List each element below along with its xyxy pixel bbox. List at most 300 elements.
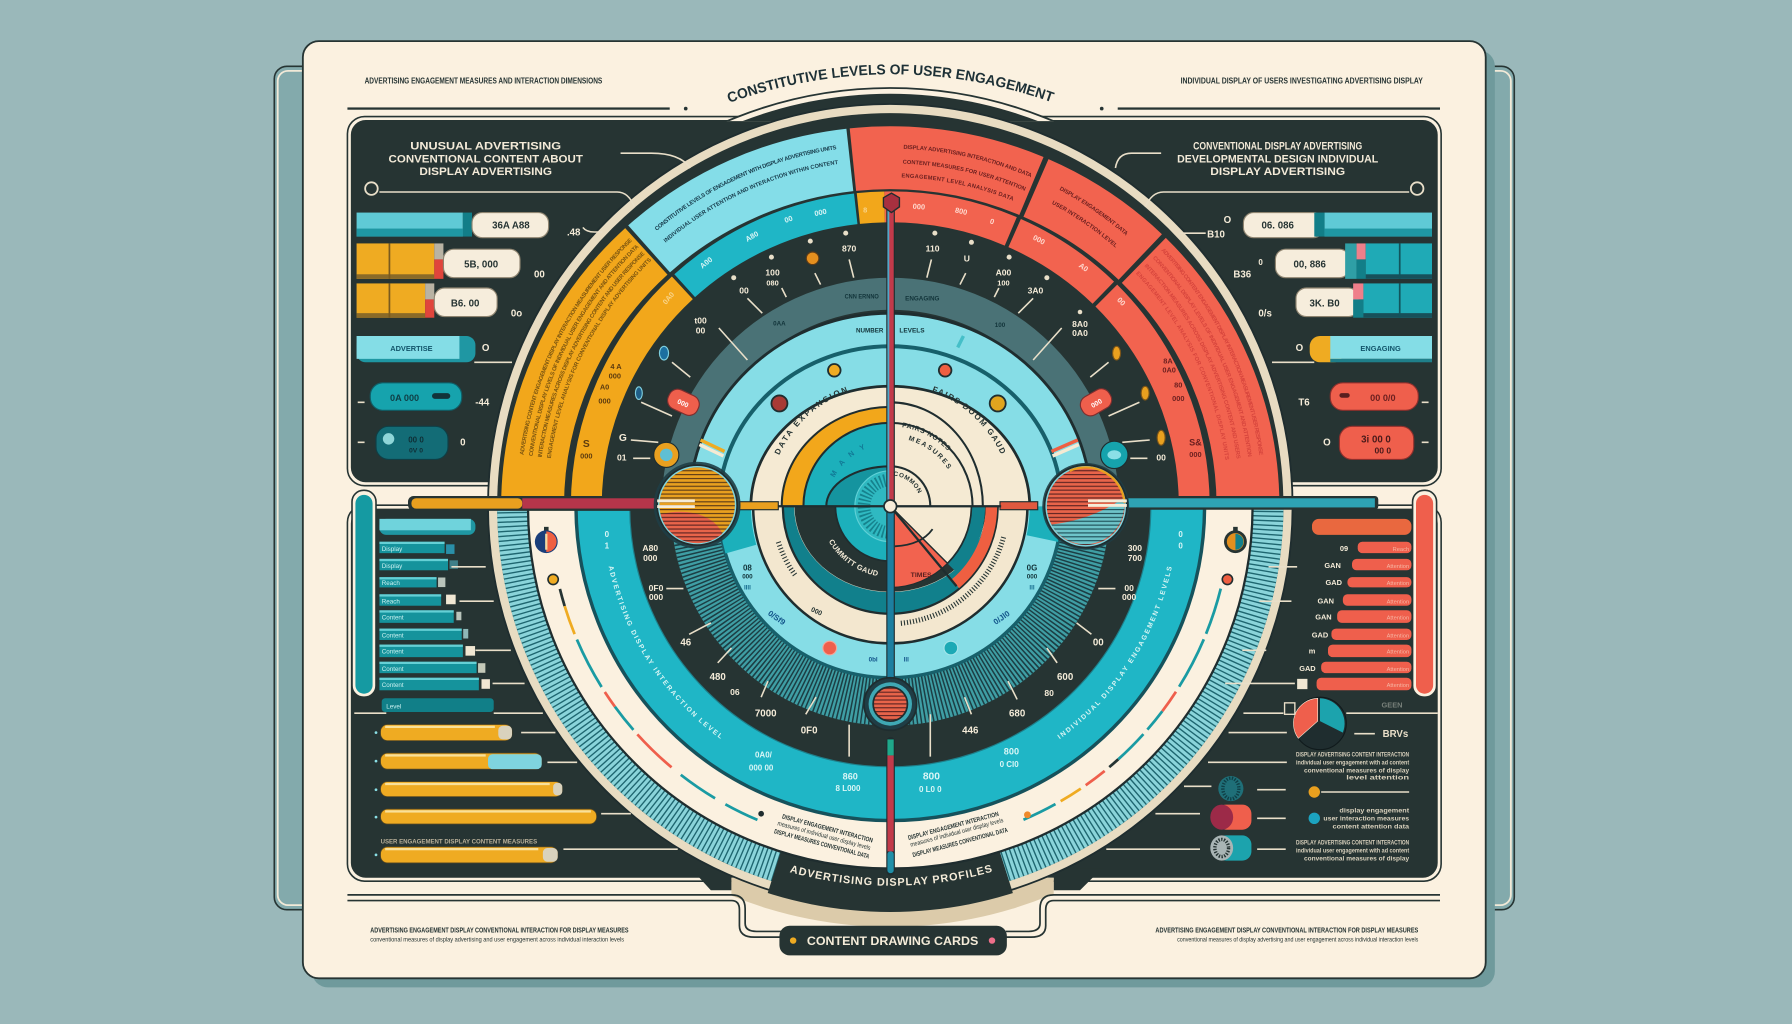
band text: red middle: USER INTERACTION LEVEL: [1052, 200, 1116, 248]
right outer labels: O: [1224, 215, 1232, 226]
lower scale labels left: 0F0: [801, 726, 818, 737]
left outer labels: 00: [534, 270, 545, 281]
title: CONSTITUTIVE LEVELS OF USER ENGAGEMENT: [728, 64, 1055, 102]
pie labels: GEEN: [1382, 700, 1402, 709]
lower scale labels left: 000: [643, 553, 658, 563]
footer note left: conventional measures of display advertising and user engagement across individual interaction levels: [370, 937, 624, 944]
hatched inner ring: [674, 538, 1106, 725]
inner band segments: [571, 191, 1210, 496]
right bar 2: [1275, 243, 1432, 279]
lower scale labels right: [930, 543, 1142, 757]
footer note right: conventional measures of display advertising and user engagement across individual interaction levels: [1177, 937, 1418, 944]
lower ring curved texts: CUMMITT GAUD: [830, 540, 878, 576]
inner curved labels: COMMON: [894, 472, 922, 494]
needle upper: [883, 193, 899, 506]
right heading: CONVENTIONAL DISPLAY ADVERTISING: [1193, 141, 1362, 153]
inner curved labels: MEASURES: [908, 436, 952, 468]
right capsule: [1413, 490, 1437, 697]
right bar 4: ENGAGING: [1360, 344, 1401, 353]
hatched outer ring: [497, 510, 1284, 881]
grey ring labels: LEVELS: [899, 328, 925, 335]
horizontal rod right: [1086, 496, 1378, 510]
grey ring labels: [773, 293, 1006, 335]
lower ring curved texts: IIIIIIIIIIIIIIIIIIIIIIIIIIIIIIIIIIIIIIIIIIIIIIII: [900, 536, 1006, 626]
tan shadow below dial: [731, 878, 1054, 926]
teal band: [574, 510, 1206, 822]
pin: red pill left: 000: [676, 398, 689, 410]
bar list: teal left: Content: [382, 633, 404, 640]
inner lower labels: 000: [742, 573, 753, 580]
dial scale labels upper left: 100: [765, 267, 780, 277]
double rule bottom left: [347, 895, 782, 937]
inner lower labels: 0/Sf9: [766, 609, 787, 627]
inner band labels: 000: [1172, 394, 1184, 403]
left bar 2: [357, 243, 520, 279]
cream ring notes right: DISPLAY MEASURES CONVENTIONAL DATA: [912, 827, 1009, 859]
text block 3: conventional measures of display: [1304, 856, 1410, 863]
dial scale labels upper left: 00: [739, 286, 749, 296]
light blue ring: [720, 510, 1060, 679]
pin: red pill right: [1077, 385, 1115, 419]
inner band labels: S&: [1189, 438, 1202, 448]
bar list: red right: Attention: [1387, 599, 1409, 605]
cream inner ring: [752, 507, 1029, 645]
light blue inner: [721, 344, 1060, 506]
inner lower labels: 000: [810, 606, 823, 618]
text block 1: [1296, 752, 1410, 781]
band text: red middle: DISPLAY ENGAGEMENT DATA: [1060, 186, 1128, 236]
lower scale labels right: 80: [1044, 688, 1054, 698]
bar list: teal left: Display: [382, 563, 403, 570]
lower scale labels left: 0F0: [649, 583, 664, 593]
inner band labels: 8: [863, 206, 867, 215]
pins and small rings: 01: [617, 453, 627, 463]
bar list: teal left: Content: [382, 666, 404, 673]
pin: red pill left: [665, 386, 702, 418]
grey ring labels: CNN ERNNO: [845, 293, 879, 300]
left outer labels: O: [482, 343, 490, 354]
grey ring labels: NUMBER: [856, 328, 884, 335]
inner band labels: 0A0: [1162, 366, 1176, 375]
inner band labels: 0: [989, 217, 995, 226]
inner band labels: 000: [598, 396, 611, 405]
inner band labels: 000: [1189, 450, 1202, 459]
dial scale labels upper right: A00: [996, 267, 1012, 277]
grey teal ring: [664, 278, 1117, 478]
bar list: red right: Attention: [1387, 615, 1409, 621]
band text: red right: INTERACTION MEASURES ACROSS DISPLAY ADVERTISING CONTENT AND USERS: [1144, 264, 1240, 458]
inner lower labels: [742, 563, 1038, 664]
band text: orange: ADVERTISING CONTENT ENGAGEMENT DISPLAY INTERACTION MEASUREMENT USER RESPONSE: [520, 238, 632, 455]
pie chart: [1293, 697, 1346, 750]
pin: red pill right: 000: [1090, 398, 1104, 410]
bar list: red right: Attention: [1387, 650, 1409, 656]
left heading: [389, 141, 583, 178]
right pill 6: 00 0: [1375, 446, 1391, 456]
lower scale labels right: 446: [962, 726, 979, 737]
dial scale labels upper right: U: [964, 254, 970, 264]
lower scale labels left: 7000: [755, 709, 777, 720]
header rule left: [347, 107, 688, 110]
grey ring labels: 100: [995, 322, 1006, 329]
card: [303, 41, 1486, 978]
bar list: red right: Attention: [1387, 564, 1409, 570]
horizontal rod left: [408, 496, 697, 511]
footer note left: ADVERTISING ENGAGEMENT DISPLAY CONVENTIONAL INTERACTION FOR DISPLAY MEASURES: [370, 926, 629, 935]
inner lower labels: 08: [743, 563, 752, 572]
band text: blue: CONSTITUTIVE LEVELS OF ENGAGEMENT WITH DISPLAY ADVERTISING UNITS: [655, 146, 836, 230]
text block 1: level attention: [1346, 774, 1409, 781]
dial scale labels upper right: 0A0: [1072, 328, 1088, 338]
right bar 4: [1310, 336, 1432, 362]
teal inner ring: [782, 507, 999, 615]
text block 1: DISPLAY ADVERTISING CONTENT INTERACTION: [1296, 752, 1410, 759]
band text: blue: INDIVIDUAL USER ATTENTION AND INTERACTION WITHIN CONTENT: [664, 160, 838, 242]
needle lower: [886, 506, 895, 875]
left pill 5: 0A 000: [390, 393, 419, 403]
inner band labels: S: [583, 439, 590, 450]
bar list: teal left: Display: [382, 546, 403, 553]
pins and small rings: G: [619, 433, 627, 444]
right outer labels: B10: [1207, 230, 1225, 241]
inner lower labels: 0G: [1027, 563, 1037, 572]
left outer labels: -44: [475, 398, 490, 409]
light blue outer: [693, 314, 1088, 506]
inner curved labels: DATA EXPANSION: [774, 386, 847, 455]
text block 2: content attention data: [1333, 824, 1410, 831]
inner band labels: 80: [1174, 380, 1182, 389]
lower scale labels right: 300: [1128, 543, 1142, 553]
double rule bottom right: [1006, 895, 1440, 937]
right bar 2: 00, 886: [1294, 259, 1327, 270]
inner curved labels: FAIRS DOOM GAUD: [932, 386, 1005, 454]
dial scale labels upper right: [926, 231, 1088, 338]
bar list: red right: [1225, 519, 1411, 690]
lower scale labels left: A80: [642, 543, 658, 553]
right pill 5: [1330, 383, 1418, 410]
teal band inner labels: 1: [605, 542, 610, 551]
left pill 5: [370, 383, 462, 410]
connectors left: [365, 153, 690, 362]
bar list: teal left: Reach: [382, 598, 400, 605]
teal band inner labels: 0: [1178, 530, 1183, 539]
inner curved labels: [774, 386, 1005, 494]
band text: red top: [902, 144, 1031, 201]
upper right arcs: [894, 401, 984, 506]
left heading: UNUSUAL ADVERTISING: [410, 141, 561, 153]
bar list: red right: Attention: [1387, 683, 1409, 689]
inner teal left quarter: [836, 507, 886, 560]
left outer labels: 0: [460, 438, 466, 449]
inner curved labels: MANY: [830, 444, 864, 478]
inner band labels: 0A0: [661, 290, 676, 306]
bar list: red right: GAD: [1325, 578, 1343, 587]
left pill 6: [376, 426, 448, 459]
text block 3: individual user engagement with ad content: [1296, 848, 1410, 855]
cream ring notes left: DISPLAY MEASURES CONVENTIONAL DATA: [773, 828, 870, 861]
band text: red right: ENGAGEMENT LEVEL ANALYSIS FOR CONVENTIONAL DISPLAY UNITS: [1136, 271, 1229, 460]
lower scale labels left: 480: [710, 672, 726, 683]
back tab left: [274, 66, 331, 910]
lower scale labels right: 000: [1122, 592, 1137, 602]
bar list: red right: m: [1309, 647, 1316, 656]
inner lower labels: lll: [904, 657, 909, 664]
bar list: red right: 09: [1340, 544, 1348, 553]
band text: orange: CONVENTIONAL DISPLAY LEVELS OF INDIVIDUAL USER ENGAGEMENT AND ATTENTION DATA: [529, 245, 639, 456]
cream ring notes left: [773, 813, 874, 861]
inner lower labels: IIII: [744, 585, 751, 592]
grey ring labels: ENGAGING: [905, 296, 940, 303]
inner band labels: A0: [600, 383, 609, 392]
text block 2: display engagement: [1339, 808, 1410, 815]
band text: red top: ENGAGEMENT LEVEL ANALYSIS DATA: [902, 174, 1013, 201]
teal band inner labels: 800: [1004, 746, 1019, 756]
right outer labels: O: [1323, 438, 1331, 449]
inner lower labels: III: [1029, 585, 1035, 592]
bar list: red right: GAD: [1299, 664, 1316, 673]
header note left: ADVERTISING ENGAGEMENT MEASURES AND INTERACTION DIMENSIONS: [365, 75, 603, 85]
teal band inner labels: 0A0/: [755, 751, 773, 760]
inner band labels: 000: [814, 207, 828, 218]
bar list: teal left: Content: [382, 682, 404, 689]
bar list: teal left: Level: [386, 704, 401, 711]
footer note right: ADVERTISING ENGAGEMENT DISPLAY CONVENTIONAL INTERACTION FOR DISPLAY MEASURES: [1155, 926, 1418, 935]
stopwatch icon right: [1224, 527, 1247, 553]
bottom pill: CONTENT DRAWING CARDS: [807, 934, 978, 948]
bar list: teal left: Reach: [382, 580, 400, 587]
bar list: red right: GAN: [1317, 596, 1334, 605]
left heading: CONVENTIONAL CONTENT ABOUT: [389, 153, 583, 165]
lower scale labels right: 00: [1093, 638, 1104, 649]
pins and small rings: [617, 346, 1166, 469]
dial scale labels upper left: 870: [842, 243, 857, 253]
bar list: orange left: [375, 725, 678, 863]
text block 2: [1309, 786, 1410, 831]
grey ring labels: 0AA: [773, 321, 786, 328]
teal band inner labels: 860: [843, 771, 858, 781]
bar list: teal left: Content: [382, 649, 404, 656]
dashed colour arc right: [1023, 588, 1222, 821]
dial scale labels upper right: 8A0: [1072, 319, 1088, 329]
pie labels: BRVs: [1383, 729, 1408, 740]
band text: orange: INTERACTION MEASURES ACROSS DISPLAY ADVERTISING CONTENT AND USER RESPONSE: [538, 252, 645, 457]
lower scale labels left: 06: [730, 687, 740, 697]
text block 3: DISPLAY ADVERTISING CONTENT INTERACTION: [1296, 840, 1410, 847]
cream ring notes right: [907, 811, 1009, 859]
bar list: red right: Attention: [1387, 667, 1409, 673]
hatched roller icons: [1106, 776, 1286, 861]
right pill 5: 00 0/0: [1370, 393, 1396, 403]
lower right sectors: [894, 507, 998, 588]
right bar 3: 3K. B0: [1309, 298, 1340, 309]
bottom medallion: [864, 678, 917, 730]
inner band labels: [580, 202, 1202, 460]
bar list: red right: GAN: [1315, 612, 1332, 621]
bar list: red right: GAN: [1324, 561, 1341, 570]
cream ring: [526, 510, 1254, 868]
dial scale labels upper right: 110: [926, 243, 940, 253]
inner band labels: A0: [1077, 261, 1090, 274]
right bar 1: 06. 086: [1262, 221, 1295, 232]
ring accent slashes: [699, 336, 1079, 456]
dial scale labels upper left: [694, 231, 857, 336]
teal band inner labels: 8 L000: [836, 784, 861, 793]
right outer labels: [1207, 215, 1429, 449]
right outer labels: 0: [1258, 258, 1263, 267]
dial scale labels upper left: 00: [696, 326, 706, 336]
lower ring curved texts: ADVERTISING DISPLAY INTERACTION LEVEL: [608, 566, 721, 739]
teal band inner labels: 800: [923, 771, 940, 782]
right heading: DISPLAY ADVERTISING: [1210, 166, 1345, 178]
medallion left: [654, 462, 741, 549]
dial: lower half: [489, 506, 1292, 912]
lower scale labels left: [642, 543, 849, 757]
inner band labels: 8A: [1163, 356, 1173, 365]
teal band inner labels: 000 00: [749, 763, 774, 772]
teal band inner labels: 0: [1178, 542, 1183, 551]
inner lower labels: 0/Jl0: [992, 609, 1012, 627]
bottom band title: ADVERTISING DISPLAY PROFILES: [790, 865, 992, 886]
left outer labels: [358, 227, 581, 449]
cream ring notes right: measures of individual user display levels: [910, 817, 1004, 849]
inner lower labels: TIMES: [911, 572, 932, 579]
cream ring dots: [548, 574, 1233, 818]
bar list: red right: Attention: [1387, 634, 1409, 640]
outer band segments: [501, 126, 1280, 496]
left bar 2: 5B, 000: [464, 259, 498, 270]
stopwatch icon left: [535, 527, 558, 553]
right bar 1: [1243, 213, 1432, 238]
teal band inner labels: 0 L0 0: [919, 785, 942, 794]
lower scale labels right: 700: [1128, 553, 1142, 563]
lower ring curved texts: IIIIIIIIIIII: [776, 541, 797, 576]
left outer labels: .48: [567, 227, 581, 238]
separators in grey ring: [631, 259, 1150, 458]
left bar 4: [357, 336, 475, 362]
inner curved labels: FAIRS NOTES: [902, 422, 950, 450]
panel outlines: [347, 117, 1441, 881]
short rods: [739, 502, 1038, 510]
center small disc lower: [854, 507, 886, 542]
connectors right: [1115, 153, 1423, 362]
cream ring notes left: measures of individual user display levels: [777, 820, 871, 852]
teal band inner labels: 0: [605, 530, 610, 539]
center small disc: [854, 470, 886, 506]
upper left orange and teal: [780, 406, 886, 506]
lower ring markers: [823, 641, 958, 655]
lower scale labels right: 600: [1057, 672, 1073, 683]
inner band labels: A00: [698, 255, 714, 270]
cream ring upper: [750, 384, 1031, 506]
dashed colour arc left: [558, 588, 758, 822]
bar list: teal left: [354, 519, 543, 713]
cream ring notes right: DISPLAY ENGAGEMENT INTERACTION: [907, 811, 1000, 842]
right outer labels: 0/s: [1258, 309, 1272, 320]
text block 2: user interaction measures: [1323, 816, 1410, 823]
bar list: orange left: USER ENGAGEMENT DISPLAY CONTENT MEASURES: [381, 838, 537, 845]
dial scale labels upper right: 3A0: [1028, 286, 1044, 296]
bar list: teal left: Content: [382, 614, 404, 621]
inner band labels: 000: [1031, 233, 1047, 247]
panel: upper dark: [351, 120, 1438, 482]
light blue ring markers: [771, 364, 1006, 411]
panel: lower dark: [351, 509, 1438, 878]
right outer labels: B36: [1233, 270, 1252, 281]
left pill 6: 0V 0: [409, 448, 423, 455]
left bar 3: [357, 283, 497, 318]
left bar 4: ADVERTISE: [390, 344, 433, 353]
inner band labels: 4 A: [610, 362, 622, 371]
footer note left: [370, 926, 629, 944]
teal band inner labels: 0 Cl0: [1000, 760, 1019, 769]
band text: orange: ENGAGEMENT LEVEL ANALYSIS FOR CONVENTIONAL DISPLAY ADVERTISING UNITS: [546, 258, 651, 458]
dial scale labels upper left: t00: [694, 315, 707, 325]
pie labels: [1208, 700, 1438, 762]
bar list: red right: GAD: [1312, 631, 1329, 640]
inner band labels: 000: [912, 202, 925, 212]
card shadow: [312, 50, 1495, 987]
lower scale labels right: 680: [1009, 709, 1025, 720]
left capsule: [352, 490, 376, 697]
right heading: DEVELOPMENTAL DESIGN INDIVIDUAL: [1177, 153, 1379, 165]
left outer labels: 0o: [511, 309, 522, 320]
text block 1: individual user engagement with ad content: [1296, 760, 1410, 767]
band text: red top: DISPLAY ADVERTISING INTERACTION AND DATA: [904, 144, 1031, 178]
inner band labels: 000: [580, 451, 592, 460]
header rule right: [1100, 107, 1440, 110]
inner band labels: 800: [954, 206, 968, 217]
bottom band: [768, 852, 1013, 912]
dial: upper half: [487, 104, 1294, 506]
lower scale labels left: 46: [680, 638, 692, 649]
right outer labels: O: [1296, 343, 1304, 354]
medallion right: [1042, 463, 1129, 550]
footer note right: [1155, 926, 1418, 944]
right pill 6: 3i 00 0: [1361, 434, 1391, 445]
back tab right: [1457, 66, 1514, 910]
inner band labels: 00: [783, 214, 794, 225]
left bar 1: 36A A88: [492, 221, 530, 232]
pins and small rings: 00: [1156, 453, 1166, 463]
left bar 3: B6. 00: [451, 298, 479, 309]
center hub: [884, 500, 897, 513]
inner band labels: 000: [609, 371, 621, 380]
bar list: red right: Attention: [1387, 581, 1409, 587]
lower ring curved texts: INDIVIDUAL DISPLAY ENGAGEMENT LEVELS: [1057, 566, 1172, 739]
text block 3: [1296, 840, 1410, 863]
lower scale labels left: 000: [649, 592, 663, 602]
dial scale labels upper left: 080: [766, 279, 779, 288]
right pill 6: [1339, 426, 1414, 459]
lower ring curved texts: [608, 536, 1172, 739]
dial scale labels upper right: 100: [997, 279, 1010, 288]
inner lower labels: 0bl: [869, 657, 878, 664]
bottom pill: [779, 926, 1007, 955]
inner lower labels: 000: [1027, 573, 1038, 580]
text block 1: conventional measures of display: [1304, 768, 1410, 775]
bottom panel tabs: [697, 869, 1104, 890]
band text: red top: CONTENT MEASURES FOR USER ATTENTION: [902, 160, 1026, 191]
band text: red right: CONVENTIONAL DISPLAY LEVELS OF INDIVIDUAL USER ENGAGEMENT AND ATTENTION: [1154, 256, 1252, 456]
lower scale labels right: 00: [1124, 583, 1134, 593]
bar list: red right: Reach: [1393, 547, 1409, 553]
right outer labels: T6: [1298, 398, 1310, 409]
teal band inner labels: [605, 530, 1183, 794]
left heading: DISPLAY ADVERTISING: [419, 166, 552, 178]
inner band labels: 00: [1115, 295, 1127, 308]
inner band labels: A80: [744, 229, 760, 244]
band text: red right: ADVERTISING CONTENT ENGAGEMENT DISPLAY INTERACTION MEASUREMENT USER RESPONSE: [1162, 249, 1264, 456]
